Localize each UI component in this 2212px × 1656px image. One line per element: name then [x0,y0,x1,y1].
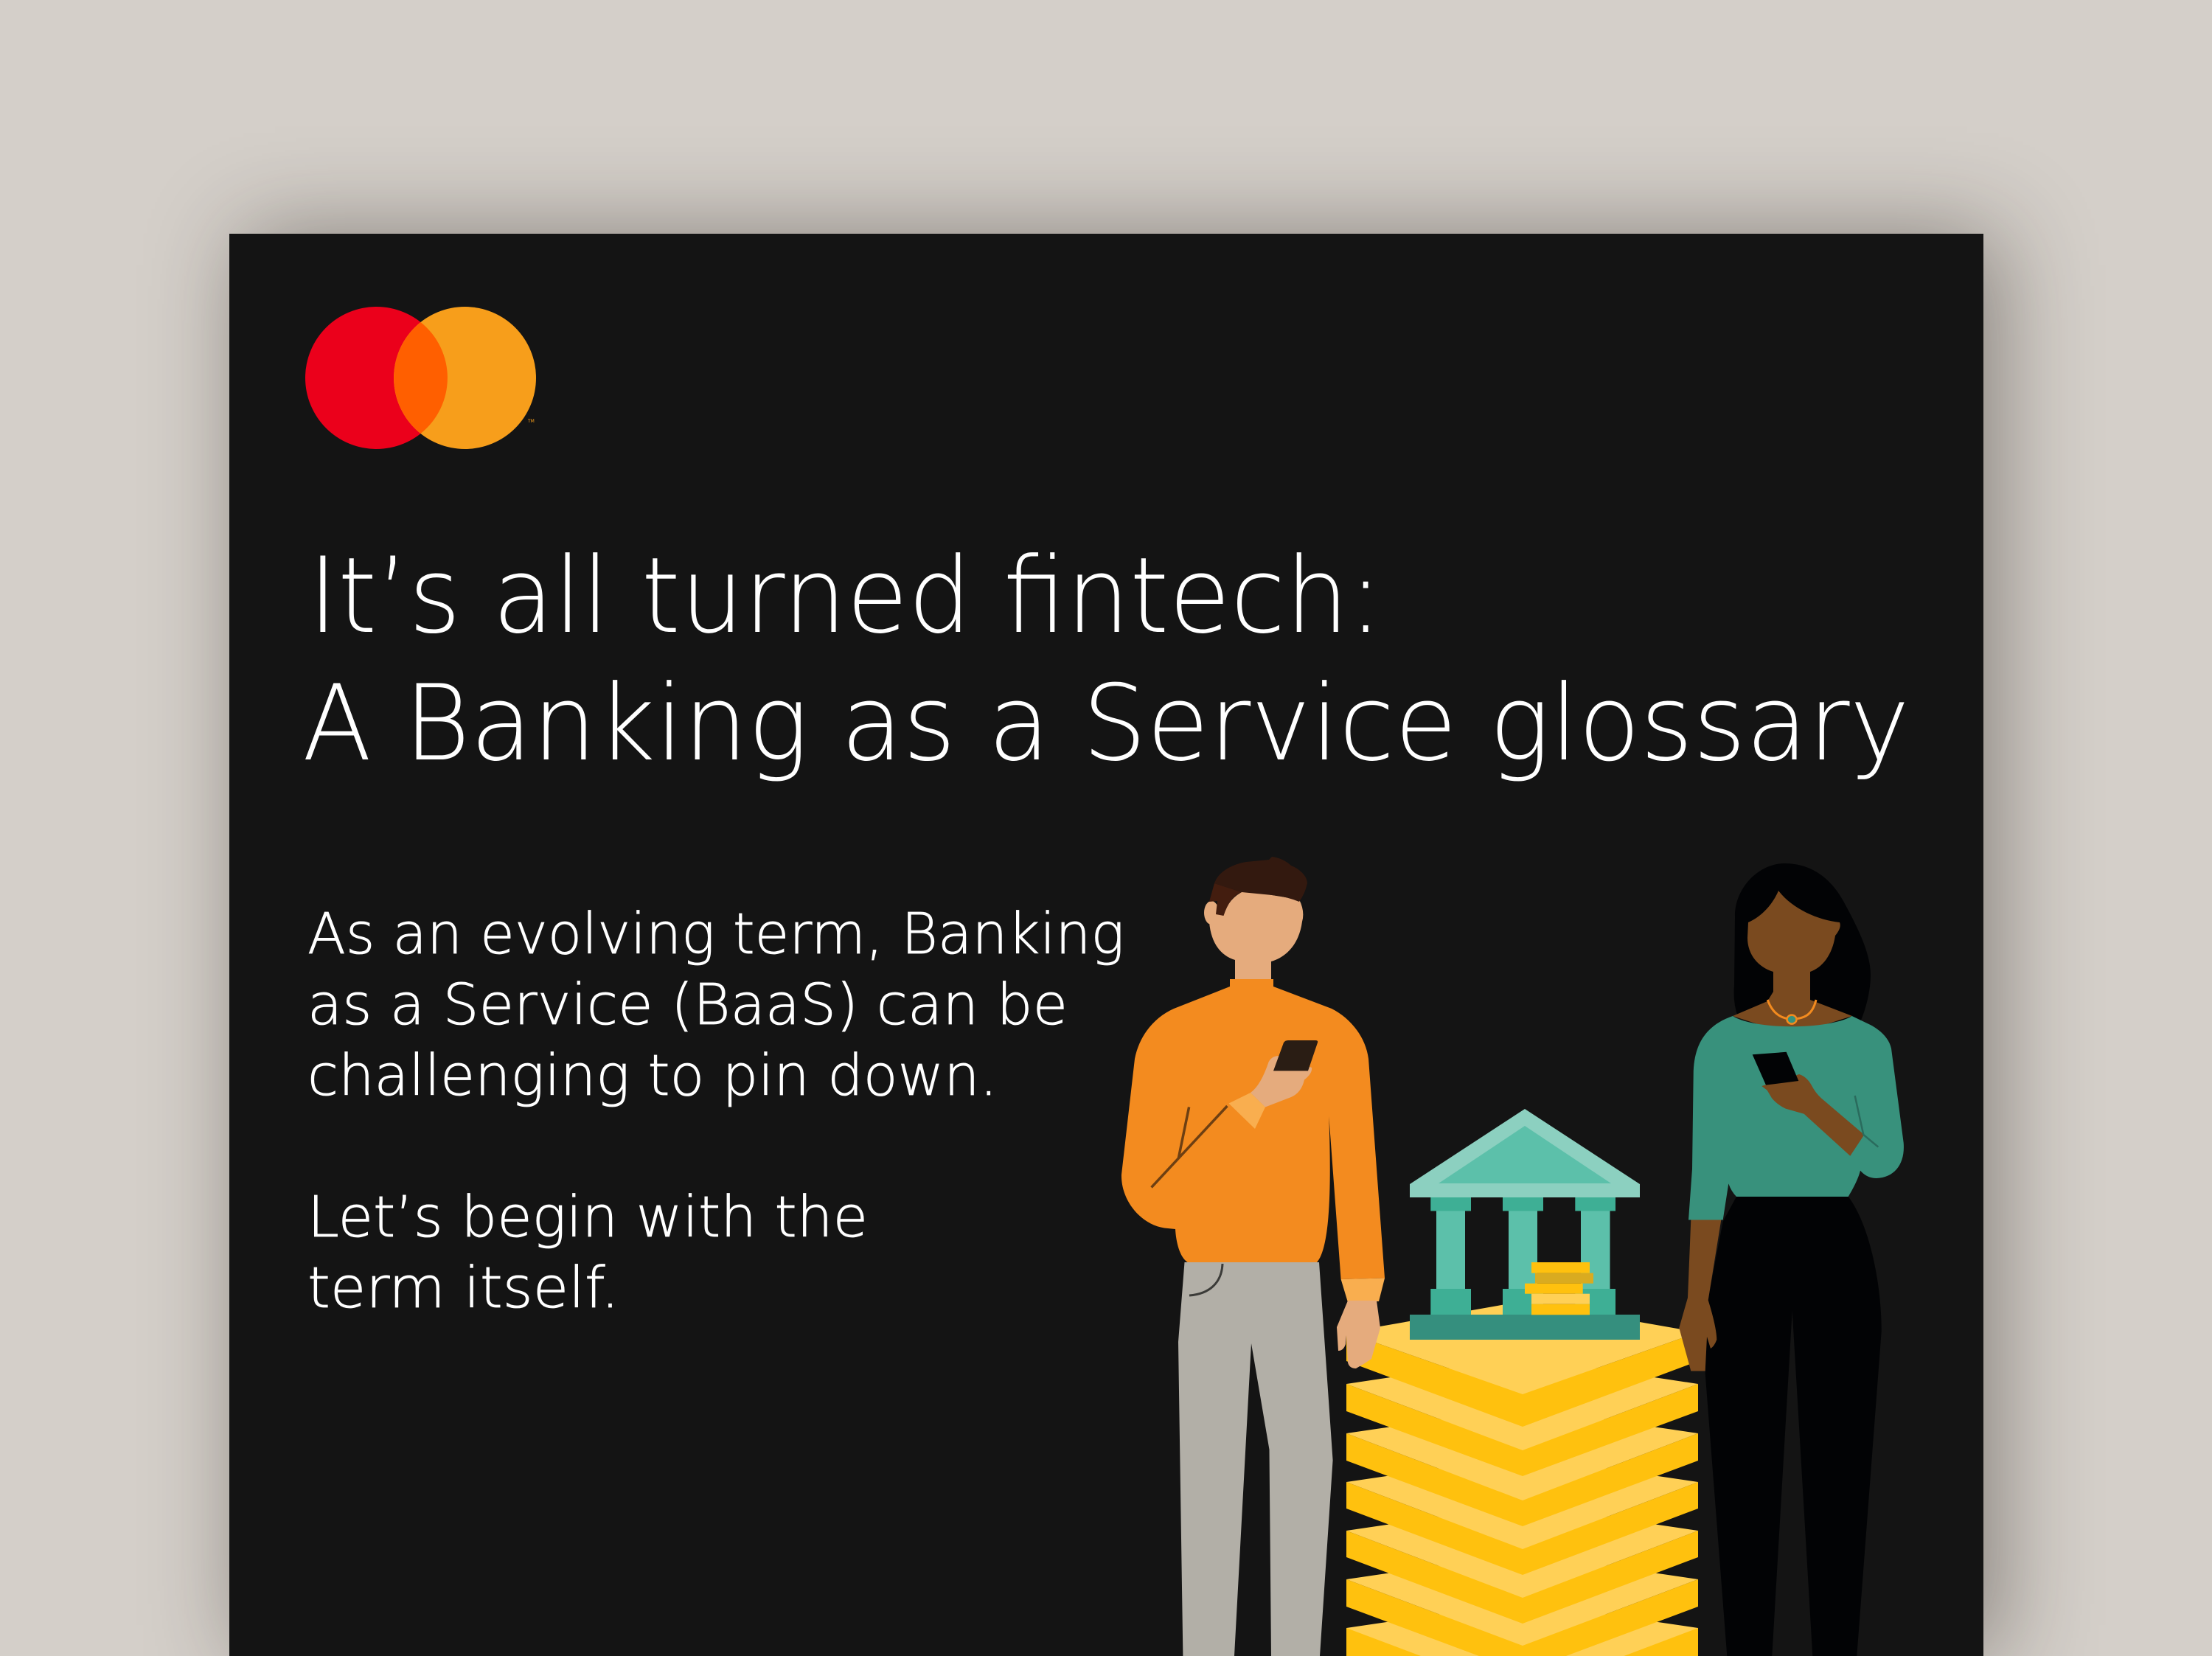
text block: introduction: As an evolving term, Banking [307,902,1124,967]
title: A Banking as a Service glossary [302,663,1910,784]
text block: introduction: challenging to pin down. [307,1043,998,1109]
text block: introduction: as a Service (BaaS) can be [307,973,1068,1038]
figure: man in orange sweater [1121,857,1385,1656]
title: It’s all turned fintech: [308,535,1382,657]
icon: Mastercard logo [305,307,536,449]
text block: introduction [307,902,1124,1321]
icon: bank building [1410,1109,1640,1340]
icon: Mastercard logo: TM [527,419,535,424]
panel: dark card [229,234,1983,1656]
text block: introduction: Let’s begin with the [307,1185,868,1250]
stack of gold coins [1346,1301,1698,1656]
text block: introduction: term itself. [307,1256,619,1321]
figure: woman in green top [1679,863,1904,1656]
small coin pile [1525,1262,1593,1315]
title [302,535,1910,784]
